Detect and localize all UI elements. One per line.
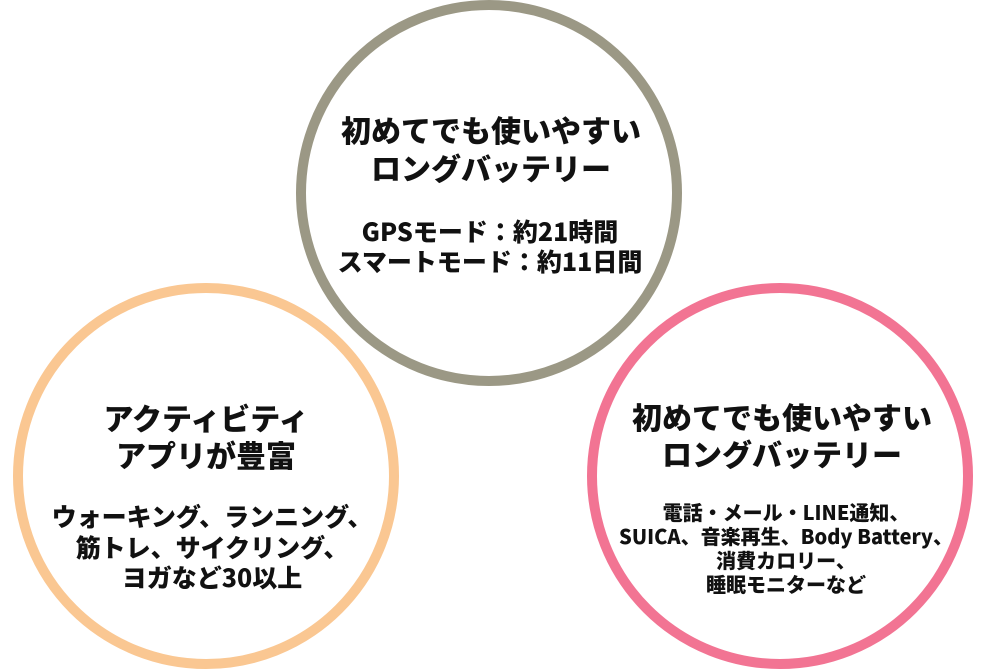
text: battery modes [338,213,642,279]
heading: battery: 初めてでも使いやすい [341,107,641,151]
text: feature list: 睡眠モニターなど [706,569,866,598]
heading: activity apps [104,395,308,476]
text: battery modes: スマートモード：約11日間 [338,243,642,279]
heading: battery: ロングバッテリー [371,145,611,189]
text: activity list: 筋トレ、サイクリング、 [76,528,348,564]
panel: smart features circle [587,283,973,669]
panel: battery circle [296,0,682,386]
heading: smart features: ロングバッテリー [662,431,902,475]
text: battery modes: GPSモード：約21時間 [362,213,618,249]
text: feature list: 電話・メール・LINE通知、 [663,497,909,526]
text: feature list: 消費カロリー、 [716,545,856,574]
text: activity list: ヨガなど30以上 [122,559,302,595]
text: activity list [52,498,372,595]
text: activity list: ウォーキング、ランニング、 [52,498,372,534]
heading: battery [341,107,641,189]
text: feature list: SUICA、音楽再生、Body Battery、 [619,521,953,550]
heading: smart features [632,394,932,475]
heading: activity apps: アプリが豊富 [116,432,296,476]
heading: activity apps: アクティビティ [104,395,308,439]
panel: activity apps circle [13,283,399,669]
text: feature list [619,497,953,598]
heading: smart features: 初めてでも使いやすい [632,394,932,438]
